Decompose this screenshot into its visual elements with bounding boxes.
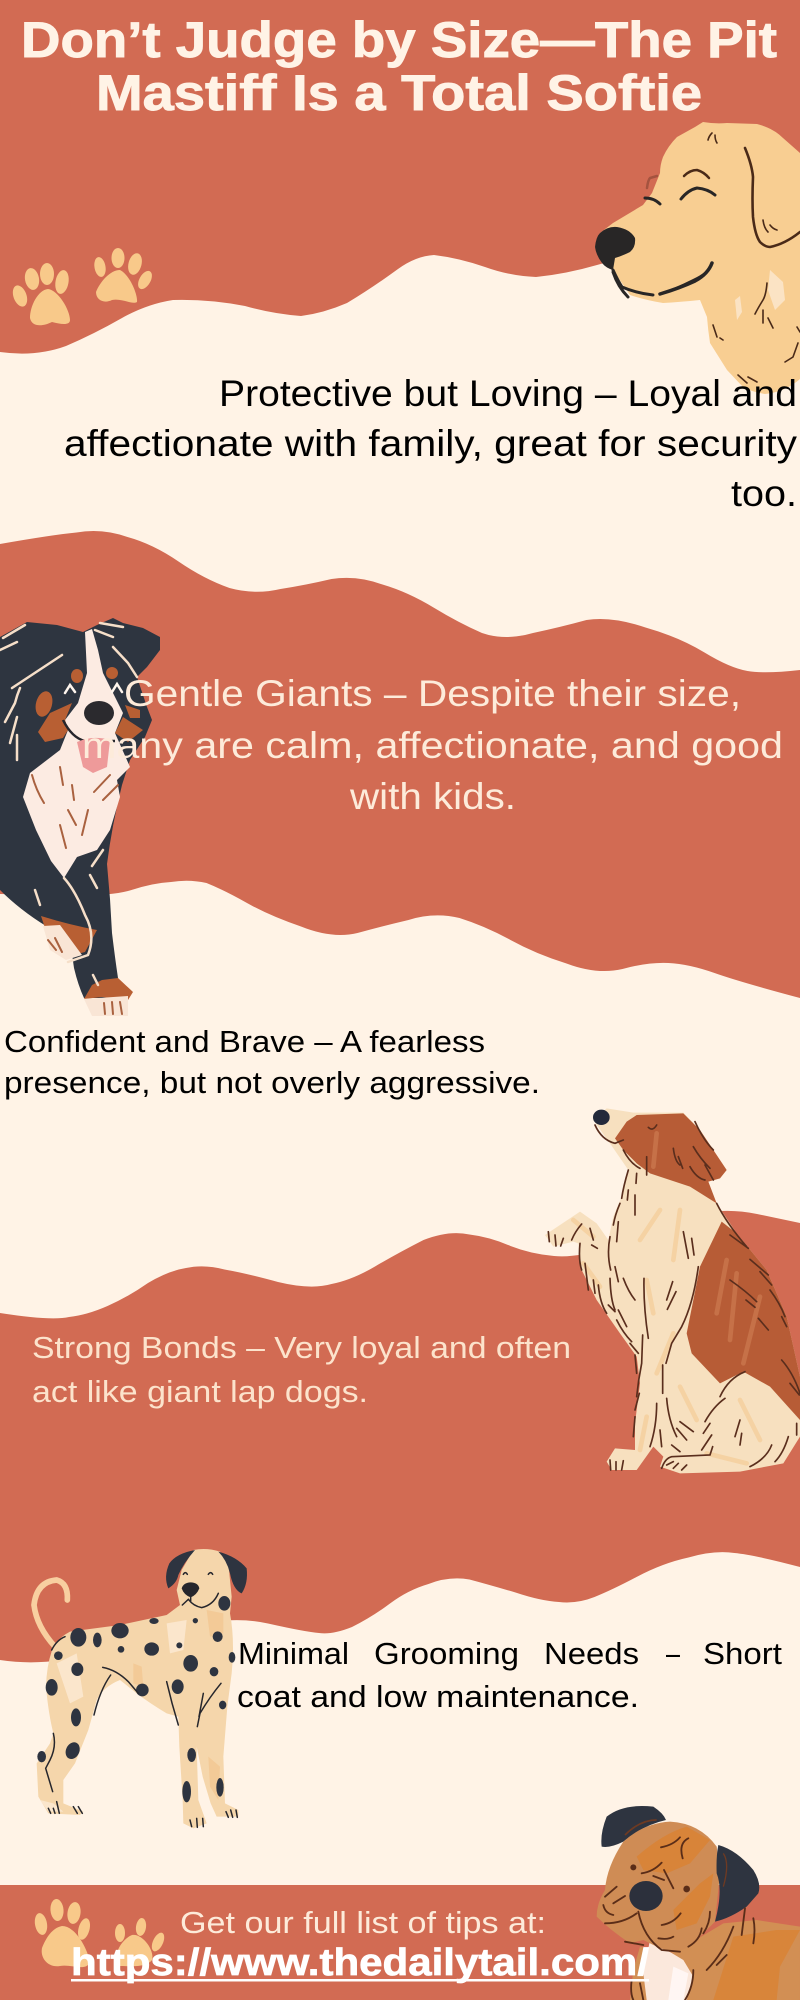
body text: minimal grooming needs: Grooming [374, 1636, 519, 1671]
body text: minimal grooming needs: coat and low maintenance. [237, 1679, 639, 1714]
title: Mastiff Is a Total Softie [96, 65, 702, 121]
body text: minimal grooming needs: Short [703, 1636, 782, 1671]
footer band [0, 1885, 800, 2000]
icon: golden dog [595, 122, 800, 394]
body text: strong bonds: act like giant lap dogs. [32, 1374, 368, 1409]
body text: gentle giants: Gentle Giants – Despite their size, [124, 673, 741, 714]
body text: protective but loving: too. [731, 473, 797, 514]
title [21, 12, 777, 121]
icon: paw prints footer [33, 1898, 167, 1967]
body text: minimal grooming needs: Needs [544, 1636, 639, 1671]
icon: dalmatian dog [34, 1549, 247, 1828]
icon: bernese dog [0, 618, 160, 1016]
icon: bulldog [597, 1806, 800, 2000]
body text: minimal grooming needs [237, 1636, 782, 1714]
top wave background panel [0, 0, 800, 354]
body text: confident and brave [4, 1024, 540, 1100]
lower wave panel: strong bonds [0, 1211, 800, 1662]
body text: gentle giants: many are calm, affectionate, and good [82, 725, 783, 766]
body text: strong bonds [32, 1330, 571, 1409]
title: Don’t Judge by Size—The Pit [21, 12, 777, 68]
body text: strong bonds: Strong Bonds – Very loyal and often [32, 1330, 571, 1365]
body text: minimal grooming needs: – [666, 1636, 681, 1671]
body text: confident and brave: presence, but not overly aggressive. [4, 1065, 540, 1100]
body text: protective but loving: affectionate with family, great for security [64, 423, 798, 464]
icon: paw prints top [10, 248, 155, 325]
body text: minimal grooming needs: Minimal [238, 1636, 349, 1671]
middle wave panel: gentle giants [0, 531, 800, 998]
footer url link: https://www.thedailytail.com/ [71, 1942, 649, 1984]
body text: protective but loving: Protective but Loving – Loyal and [219, 373, 797, 414]
footer call to action text: Get our full list of tips at: [180, 1905, 546, 1940]
body text: gentle giants [82, 673, 783, 817]
body text: gentle giants: with kids. [349, 776, 516, 817]
body text: confident and brave: Confident and Brave – A fearless [4, 1024, 485, 1059]
icon: sitting brown and cream dog [545, 1108, 800, 1473]
body text: protective but loving [64, 373, 798, 514]
